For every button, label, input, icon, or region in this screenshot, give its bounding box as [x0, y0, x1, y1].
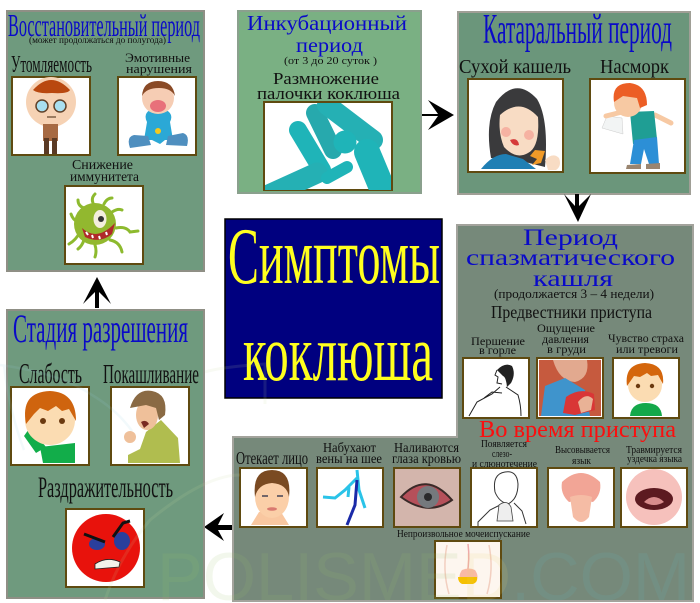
label: bacteria multiplication: Размножение [273, 69, 379, 88]
note: duration: (может продолжаться до полугода) [29, 35, 166, 46]
label: sore throat: в горле [479, 343, 516, 357]
arrow: to resolution stage [204, 513, 232, 541]
label: lowered immunity [70, 158, 140, 185]
label: neck veins [316, 441, 382, 467]
label: bloodshot eyes: Наливаются [394, 441, 459, 456]
label: weakness: Слабость [19, 358, 82, 390]
label: tears and salivation: Появляется [481, 439, 527, 450]
arrow: to recovery period [83, 277, 111, 308]
label: bacteria multiplication: палочки коклюша [257, 84, 401, 103]
icon: angry red face [66, 509, 144, 587]
label: sore throat: Першение [471, 334, 525, 348]
icon: neck veins [317, 468, 383, 527]
panel: spasmodic cough period [233, 225, 693, 601]
label: sore throat [471, 334, 525, 357]
label: dry cough: Сухой кашель [459, 56, 571, 78]
label: emotional disorders: нарушения [126, 61, 192, 76]
label: face swelling: Отекает лицо [236, 448, 308, 468]
heading: incubation period: Инкубационный [247, 11, 407, 35]
title panel: pertussis symptoms [225, 213, 442, 398]
label: irritability: Раздражительность [38, 471, 173, 504]
subheading: during attack: Во время приступа [479, 417, 676, 443]
label: bloodshot eyes [392, 441, 461, 467]
icon: man holding throat [463, 358, 529, 418]
label: involuntary urination: Непроизвольное мочеиспускание [397, 529, 530, 540]
arrow: to catarrhal period [422, 100, 454, 130]
label: tongue frenulum injury: уздечка языка [627, 454, 682, 465]
icon: pertussis bacteria [262, 102, 392, 200]
watermark: POLISMED.COM [0, 364, 690, 603]
icon: chest pressure [537, 358, 603, 418]
label: fear or anxiety: Чувство страха [608, 331, 685, 345]
panel: resolution stage [7, 306, 204, 598]
label: tongue protrusion: Высовывается [555, 445, 610, 456]
label: tears and salivation [472, 439, 538, 470]
icon: bloodshot eye [394, 468, 460, 527]
icon: coughing woman [468, 79, 563, 172]
label: fear or anxiety: или тревоги [616, 342, 679, 356]
panel: catarrhal period [458, 7, 690, 194]
label: bloodshot eyes: глаза кровью [392, 452, 461, 467]
label: runny nose: Насморк [600, 56, 669, 78]
icon: tired boy with glasses [12, 77, 90, 155]
label: fatigue: Утомляемость [11, 52, 92, 78]
label: chest pressure: Ощущение [537, 321, 595, 335]
heading: incubation period [247, 11, 407, 57]
label: neck veins: Набухают [323, 441, 376, 456]
icon: green germ [65, 186, 143, 264]
subheading: attack precursors: Предвестники приступа [491, 302, 652, 322]
label: tongue frenulum injury [626, 445, 682, 465]
icon: bladder [435, 541, 501, 598]
icon: anxious boy [613, 358, 679, 418]
panel: incubation period [238, 11, 421, 200]
label: slight cough: Покашливание [103, 359, 199, 389]
label: tears and salivation: и слюнотечение [472, 459, 538, 470]
panel: recovery period [7, 7, 204, 271]
icon: mouth with frenulum [621, 468, 687, 527]
label: tongue frenulum injury: Травмируется [626, 445, 682, 456]
label: bacteria multiplication [257, 69, 401, 103]
heading: spasmodic cough period: кашля [533, 266, 614, 291]
icon: salivating man [471, 468, 537, 527]
heading: spasmodic cough period [466, 225, 675, 291]
label: chest pressure [537, 321, 595, 356]
heading: spasmodic cough period: спазматического [466, 245, 675, 270]
label: tongue protrusion [555, 445, 610, 467]
icon: tongue [548, 468, 614, 527]
label: lowered immunity: иммунитета [70, 170, 140, 185]
icon: coughing man [111, 387, 189, 465]
title panel: pertussis symptoms: Симптомы [228, 213, 440, 301]
label: lowered immunity: Снижение [72, 158, 133, 173]
label: chest pressure: давления [542, 332, 589, 346]
label: emotional disorders [125, 50, 192, 76]
label: fear or anxiety [608, 331, 685, 356]
icon: boy with handkerchief [590, 79, 685, 173]
note: duration: (от 3 до 20 суток ) [284, 55, 377, 67]
heading: resolution stage: Стадия разрешения [13, 306, 188, 351]
label: neck veins: вены на шее [316, 452, 382, 467]
icon: boy with headache [11, 387, 89, 465]
label: tears and salivation: слезо- [492, 449, 512, 460]
heading: incubation period: период [296, 33, 363, 57]
label: emotional disorders: Эмотивные [125, 50, 190, 65]
heading: spasmodic cough period: Период [523, 225, 618, 250]
icon: swollen face [240, 468, 307, 527]
title panel: pertussis symptoms: коклюша [243, 310, 433, 398]
note: duration: (продолжается 3 – 4 недели) [494, 286, 654, 301]
icon: crying baby [118, 77, 196, 155]
label: chest pressure: в груди [547, 342, 587, 356]
arrow: to spasmodic period [564, 194, 591, 222]
heading: recovery period: Восстановительный период [8, 7, 200, 43]
label: tongue protrusion: язык [572, 456, 592, 467]
